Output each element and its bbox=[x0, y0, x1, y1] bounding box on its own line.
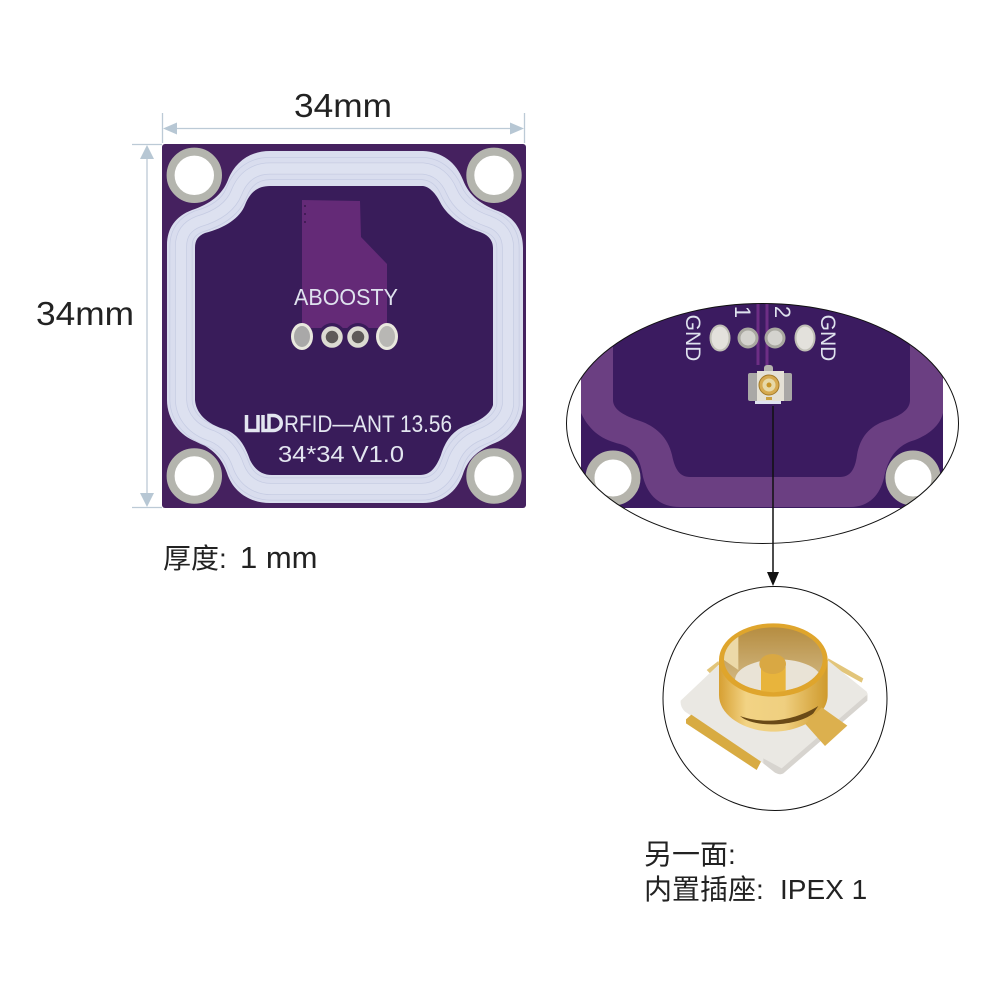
caption line 2: IPEX 1 bbox=[780, 874, 867, 905]
silkscreen model: RFID—ANT 13.56 bbox=[284, 411, 452, 438]
coil on back bbox=[581, 345, 943, 507]
ring interior bbox=[724, 627, 823, 690]
connector detail circle bbox=[663, 586, 887, 810]
mounting holes bbox=[171, 152, 518, 500]
holes on back bbox=[590, 455, 636, 501]
traces bbox=[758, 300, 767, 365]
GND left: GND bbox=[681, 315, 704, 361]
dimension: height 34mm bbox=[36, 144, 162, 508]
PCB board top view bbox=[162, 144, 526, 508]
ellipse outline bbox=[566, 304, 958, 544]
pin 2 label: 2 bbox=[770, 306, 795, 318]
gold ring top bbox=[719, 623, 828, 697]
caption line 2: 内置插座: bbox=[644, 874, 764, 905]
gold cylinder body bbox=[719, 660, 828, 732]
back gold lead bbox=[707, 658, 863, 683]
IPEX connector on board bbox=[748, 365, 792, 404]
GND right: GND bbox=[816, 315, 839, 361]
solder pads bbox=[292, 323, 396, 351]
silkscreen size and version: 34*34 V1.0 bbox=[278, 441, 404, 467]
base side shading bbox=[763, 695, 867, 774]
pads on back bbox=[710, 326, 730, 350]
center pin head bbox=[759, 654, 786, 674]
purple copper area bbox=[302, 200, 387, 328]
arrow to connector detail bbox=[767, 406, 779, 586]
ceramic base bbox=[681, 659, 868, 774]
pin 1 label: 1 bbox=[730, 306, 755, 318]
magnified back view ellipse bbox=[566, 290, 958, 544]
brand label: ABOOSTY bbox=[294, 284, 398, 310]
dimension: width 34mm bbox=[162, 87, 524, 143]
width label: 34mm bbox=[294, 87, 392, 124]
center pin stem bbox=[761, 667, 786, 692]
thickness note: 1 mm bbox=[240, 540, 318, 575]
left gold lead bbox=[686, 715, 761, 770]
silkscreen logo bbox=[246, 415, 281, 430]
caption line 1: 另一面: bbox=[644, 839, 736, 870]
groove bbox=[740, 706, 818, 724]
via dots bbox=[304, 205, 306, 223]
height label: 34mm bbox=[36, 295, 134, 332]
antenna coil bbox=[167, 151, 523, 503]
thickness note: 厚度: bbox=[163, 543, 227, 574]
connector caption bbox=[644, 839, 867, 905]
inner dark field bbox=[195, 186, 493, 475]
right gold lead bbox=[805, 707, 847, 746]
board back bbox=[581, 290, 943, 508]
